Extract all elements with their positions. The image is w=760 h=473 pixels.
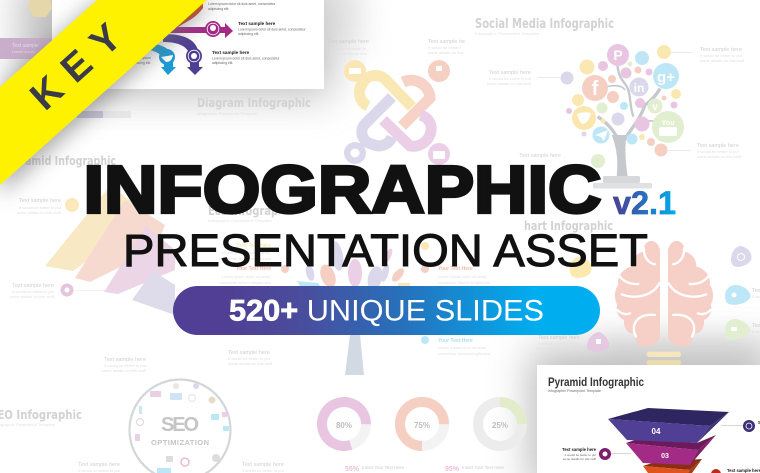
seo labels: It would be better to put <box>242 468 285 473</box>
marker right <box>721 420 760 432</box>
seo small icons <box>135 383 229 473</box>
pink marker: some details for this stuff <box>10 294 55 299</box>
brain labels: Text sample here <box>538 335 580 341</box>
list left <box>219 243 289 285</box>
panel: leaf tree list <box>219 240 490 375</box>
arrow labels: Text sample here <box>238 21 276 26</box>
orange arrow <box>160 0 203 28</box>
panel: left background slide: Lorem ipsum <box>12 49 36 54</box>
list right: some details for this stuff <box>228 361 273 366</box>
panel: social media infographic: Infographic Powerpoint Template <box>475 31 540 36</box>
yellow marker: It would be better to put <box>19 205 62 210</box>
optimization label: OPTIMIZATION <box>151 438 209 447</box>
social labels: Text sample here <box>519 153 561 159</box>
social bubbles: You <box>662 120 674 127</box>
magenta arrow <box>165 21 233 38</box>
marker left <box>562 447 631 461</box>
panel: diagram infographic heading <box>77 95 311 118</box>
list left: consetetur fierem fringilla sed <box>219 256 271 261</box>
marker left: Text sample here <box>562 447 597 452</box>
marker left: It would be better to put <box>565 453 596 457</box>
pink marker: Text sample here <box>12 283 54 289</box>
heading: Social Media Infographic <box>475 17 614 32</box>
seo labels: some details for this stuff <box>102 368 147 373</box>
brain labels: It would be better to put <box>538 341 581 346</box>
brain <box>615 241 713 365</box>
social bubbles: g+ <box>657 69 675 86</box>
panel: faded ecology heading <box>208 203 278 223</box>
brain labels: some details for this stuff <box>536 346 581 351</box>
chart: donut 80%: 80% <box>336 421 352 430</box>
social labels: It would be better to put <box>700 53 743 58</box>
knot labels: some details for this <box>428 50 464 55</box>
magnifier ring <box>130 380 230 473</box>
pyramid layer 03 <box>626 435 716 465</box>
seo labels: It would be better to put <box>78 468 121 473</box>
title: INFOGRAPHIC: INFOGRAPHIC <box>84 152 602 228</box>
social labels: some details for this stuff <box>697 154 742 159</box>
chart captions: Insert Your Text Here <box>362 465 404 470</box>
panel: left background slide <box>0 0 52 59</box>
social bubbles: f <box>592 78 599 100</box>
panel: faded ecology heading: Infographic Powerpoint Template <box>208 218 273 223</box>
tree trunk <box>598 65 660 177</box>
list left: Your Text Here <box>236 266 271 272</box>
chart captions: 95% <box>445 466 460 473</box>
social bubbles: P <box>613 47 623 63</box>
marker lower right <box>711 468 760 473</box>
pyramid layer 02 <box>643 459 702 473</box>
yellow marker: some details for this stuff <box>17 210 62 215</box>
chart: donut 25%: 25% <box>492 421 508 430</box>
social labels: It would be better to put <box>489 76 532 81</box>
social labels: Text sample here <box>700 47 742 53</box>
blue arrow <box>150 44 176 75</box>
social labels: Text sample here <box>489 70 531 76</box>
heading: amid Infographic <box>25 153 116 168</box>
chart captions <box>345 465 504 473</box>
knot labels: Text sample he <box>428 39 465 45</box>
panel: chain knot diagram <box>327 39 465 165</box>
subtitle: PRESENTATION ASSET: PRESENTATION ASSET <box>123 225 648 276</box>
pyramid layer 03: 03 <box>661 453 669 460</box>
banner shadow <box>0 0 215 195</box>
list right: Lorem ipsum dolor sit amet, <box>438 345 487 350</box>
seo labels <box>78 357 285 473</box>
knot labels: It would be better t <box>428 45 462 50</box>
list right: Your Text Here <box>438 338 473 344</box>
list right: Text sample here <box>228 350 270 356</box>
pyramid layer 04 <box>608 408 729 443</box>
social labels: some details for this stuff <box>487 81 532 86</box>
list left: Your Text Here <box>236 243 271 249</box>
arrow labels: adipiscing elit. <box>212 61 233 65</box>
leaf tree <box>297 240 410 375</box>
marker lower right: Text sample here <box>727 468 760 473</box>
list left: consetetur fierem fringilla sed <box>219 280 271 285</box>
knot labels: It would be better to <box>331 46 367 51</box>
panel: pyramid infographic slide <box>537 365 760 473</box>
panel: social media infographic <box>475 17 745 188</box>
arrow labels: adipiscing elit. <box>238 32 259 36</box>
social bubbles <box>560 44 684 168</box>
arrow labels: Text sample here <box>212 50 250 55</box>
SEO label: SEO <box>161 414 199 436</box>
banner text: KEY <box>22 7 140 119</box>
subheading: Infographic Powerpoint Template <box>548 389 601 393</box>
pill: 520+ unique slides <box>173 286 600 335</box>
arrow labels: adipiscing elit. <box>208 7 229 11</box>
chart: donut 75%: 75% <box>414 421 430 430</box>
pink marker: It would be better to put <box>12 289 55 294</box>
chart: donut 75% <box>400 402 444 446</box>
list right <box>228 242 490 366</box>
panel: faded ecology heading: Eco Infograp <box>208 203 278 218</box>
list left: Lorem ipsum dolor sit amet, <box>222 250 271 255</box>
seo labels: Text sample here <box>104 357 146 363</box>
social labels <box>487 47 745 159</box>
panel: left background slide: Text sample <box>12 43 39 49</box>
marker left: some details for this stuff <box>563 457 596 461</box>
list left: Lorem ipsum dolor sit amet, <box>222 274 271 279</box>
arrow labels: Lorem ipsum dolor sit duis amet, consectetur <box>212 56 280 60</box>
panel: faded chart heading: hart Infographic <box>524 218 613 233</box>
social bubbles: in <box>634 81 644 95</box>
yellow marker <box>17 198 79 215</box>
panel: diagram infographic heading: Infographic Powerpoint Template <box>197 111 258 116</box>
panel: SEO optimization <box>0 357 285 473</box>
arrow labels: adipiscing elit. <box>130 61 151 65</box>
seo labels: Text sample here <box>242 462 284 468</box>
3d pyramid layers <box>45 186 175 315</box>
panel: top arrows slide <box>52 0 324 89</box>
list right: consetetur fierem fringilla sed <box>438 280 490 285</box>
seo labels: Text sample here <box>78 462 120 468</box>
heading: Pyramid Infographic <box>548 377 645 389</box>
brain labels <box>536 288 760 351</box>
pyramid layer 04: 04 <box>652 427 661 436</box>
seo labels: It would be better to put <box>104 363 147 368</box>
panel: brain diagram <box>536 241 760 365</box>
arrow labels: Lorem ipsum dolor sit duis amet, consectetur <box>238 28 306 32</box>
yellow marker: Text sample here <box>19 198 61 204</box>
chart: donut 80% <box>316 396 372 452</box>
chart: donut 25% <box>478 402 522 446</box>
social labels: It would be better to put <box>697 149 740 154</box>
social labels: Text sample here <box>697 143 739 149</box>
knot icons <box>344 60 450 165</box>
chart captions: 55% <box>345 466 360 473</box>
arrow labels: Lorem ipsum dolor sit duis amet, consectetur <box>208 2 276 6</box>
version label: v2.1 <box>613 185 676 221</box>
pink marker <box>10 283 105 299</box>
panel: diagram infographic heading: Diagram Infographic <box>197 95 311 110</box>
list right: consetetur fierem fringilla sed <box>438 351 490 356</box>
brain nodes <box>570 246 752 352</box>
social bubbles: v <box>652 102 658 113</box>
panel: faded pyramid slide <box>10 153 175 315</box>
knot labels: Text sample here <box>327 39 369 45</box>
pill text: 520+ UNIQUE SLIDES <box>229 294 544 328</box>
list right: Lorem ipsum dolor sit amet, <box>438 274 487 279</box>
social labels: some details for this stuff <box>700 58 745 63</box>
banner: yellow KEY ribbon <box>0 0 207 185</box>
chart captions: Insert Your Text Here <box>462 465 504 470</box>
knot labels: some details for this <box>331 51 367 56</box>
list right: It would be better to put <box>228 356 271 361</box>
purple arrow <box>163 34 203 75</box>
tree base <box>593 176 652 188</box>
list right: Your Text Here <box>438 266 473 272</box>
arrow labels: Lorem ipsum <box>131 56 151 60</box>
knot labels <box>327 39 465 56</box>
arrow labels <box>130 2 306 65</box>
